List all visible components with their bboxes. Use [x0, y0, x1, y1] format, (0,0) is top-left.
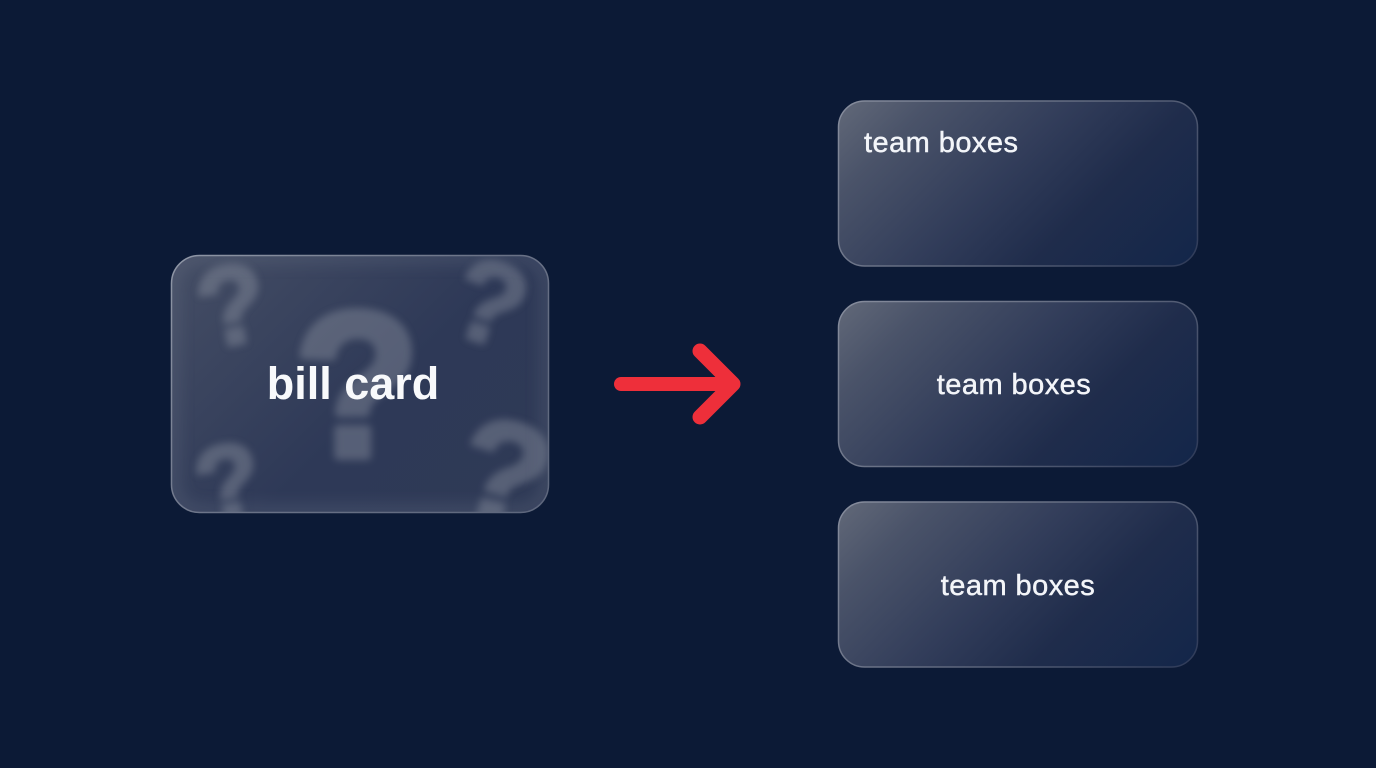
panel: team box 3 [838, 502, 1198, 667]
blurred question marks: ? [185, 418, 273, 547]
panel: bill card [170, 254, 550, 514]
label: team box 1: team boxes [864, 127, 1018, 159]
blurred question marks: ? [440, 383, 568, 564]
blurred question marks [194, 258, 548, 512]
blurred question marks: ? [294, 270, 420, 500]
card border [172, 256, 548, 512]
panel: team box 1 [838, 101, 1198, 266]
card label: bill card [267, 358, 439, 409]
inner edge glow [172, 256, 548, 512]
label: team box 3: team boxes [941, 570, 1095, 602]
arrow [621, 351, 733, 417]
panel: team box 2 [838, 302, 1198, 466]
label: team box 2: team boxes [937, 369, 1091, 401]
blurred question marks: ? [436, 230, 544, 376]
blurred question marks: ? [187, 238, 278, 373]
